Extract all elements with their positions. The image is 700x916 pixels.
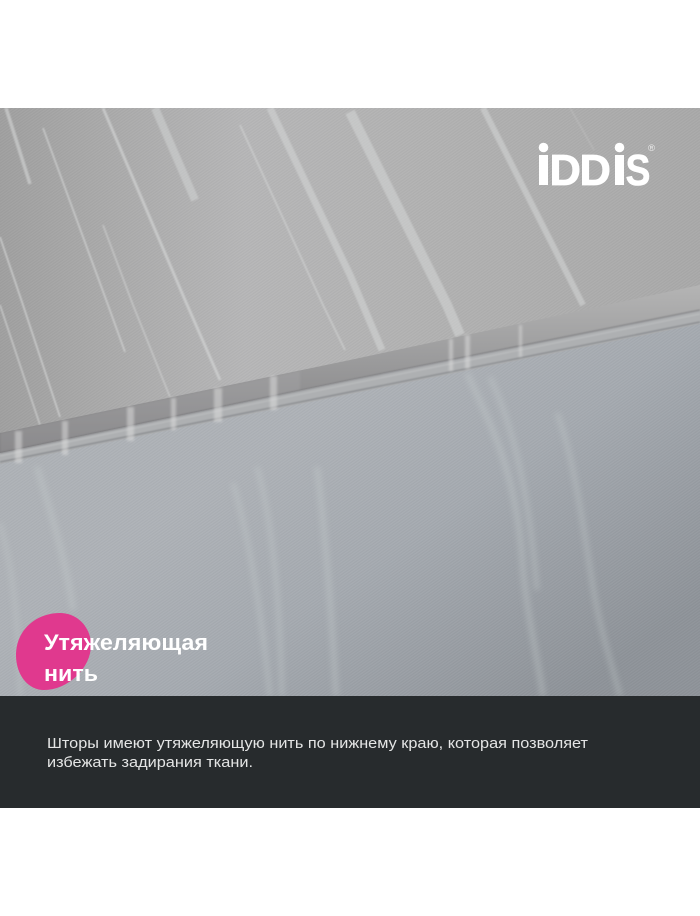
hem stitching	[0, 310, 700, 462]
dark caption panel	[0, 696, 700, 808]
infographic canvas	[0, 108, 700, 808]
light stripes on upper fabric	[0, 108, 594, 425]
heading line 2: нить	[44, 661, 98, 686]
heading line 1: Утяжеляющая	[44, 630, 208, 655]
logo I left	[539, 155, 548, 185]
registered mark: ®	[648, 143, 655, 154]
heading	[44, 630, 208, 686]
faint stripes on lower fabric	[0, 373, 620, 696]
pink accent blob	[16, 613, 91, 690]
upper fabric	[0, 108, 700, 468]
logo dots	[539, 143, 624, 152]
logo D second: D	[580, 147, 611, 195]
hem tuck tint left	[0, 392, 280, 452]
hem band	[0, 310, 700, 464]
logo I right	[615, 155, 624, 185]
logo S: S	[626, 145, 650, 195]
caption line 2: избежать задирания ткани.	[47, 754, 253, 771]
logo D first: D	[550, 147, 581, 195]
light thread crossings on hem	[15, 325, 522, 463]
caption text	[47, 735, 588, 771]
caption line 1: Шторы имеют утяжеляющую нить по нижнему краю, которая позволяет	[47, 735, 588, 752]
photo: curtain fabric with hem	[0, 108, 700, 696]
lower fabric	[0, 380, 700, 696]
logo: IDDIS	[539, 143, 655, 195]
hem tuck	[0, 285, 700, 453]
